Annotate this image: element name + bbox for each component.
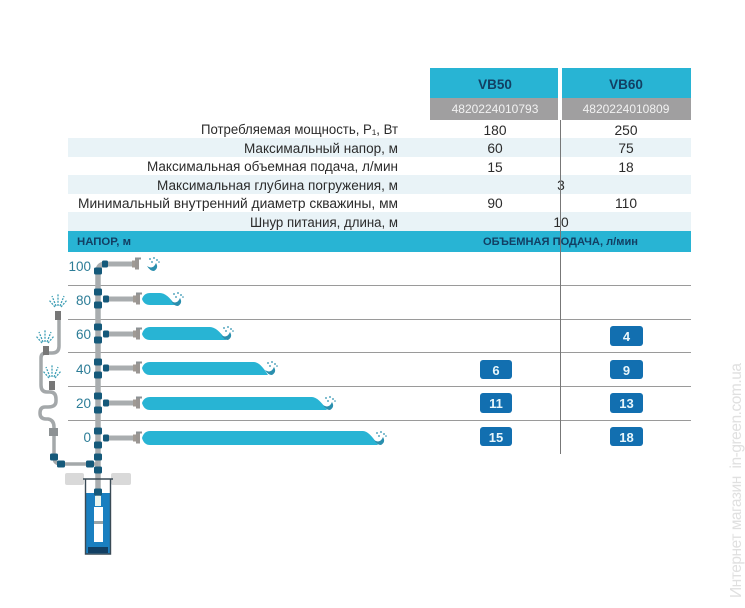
head axis labels: 80 (76, 293, 91, 308)
spec values: 15 (487, 160, 503, 175)
flow bar: 40 m (142, 361, 278, 375)
spec values: 18 (618, 160, 634, 175)
head axis labels: 0 (83, 430, 91, 445)
spec row labels: Максимальный напор, м (244, 141, 398, 156)
side hose with sprinklers (36, 294, 98, 468)
outlet nozzles (102, 258, 142, 444)
spec row labels: Потребляемая мощность, Р₁, Вт (201, 122, 398, 137)
flow value badges: 15 (489, 430, 503, 445)
spec row labels: Минимальный внутренний диаметр скважины, мм (78, 196, 398, 211)
flow bar: 80 m (142, 292, 184, 306)
table header: VB60: VB60 (609, 77, 643, 92)
table header: VB60 (562, 68, 691, 120)
head axis labels: 20 (76, 396, 91, 411)
chart grid (68, 120, 691, 454)
spec values (483, 123, 638, 230)
head axis labels: 100 (68, 259, 91, 274)
spec values: 75 (618, 141, 634, 156)
table header: VB50 (430, 68, 558, 120)
spec values: 90 (487, 196, 503, 211)
table header: VB50: 4820224010793 (452, 102, 539, 116)
flow bar: 100 m (147, 257, 160, 271)
flow value badges: 9 (623, 363, 630, 378)
spec values: 180 (483, 123, 507, 138)
flow value badges: 18 (619, 430, 634, 445)
flow bar: 60 m (142, 326, 234, 340)
spec values: 3 (557, 178, 565, 193)
performance header bar: ОБЪЕМНАЯ ПОДАЧА, л/мин (483, 236, 638, 248)
main riser pipe (94, 264, 106, 530)
flow bar: 0 m (142, 431, 387, 445)
well with pump (83, 479, 113, 554)
spec row labels: Максимальная объемная подача, л/мин (147, 159, 398, 174)
head axis labels: 40 (76, 362, 91, 377)
spec values: 110 (615, 196, 637, 211)
watermark: Интернет магазин in-green.com.ua (728, 363, 745, 598)
spec row labels (78, 122, 398, 230)
flow value badges (480, 326, 643, 446)
table header: VB50: VB50 (478, 77, 512, 92)
flow bar: 20 m (142, 396, 336, 410)
flow value badges: 13 (619, 396, 634, 411)
flow value badges: 4 (623, 329, 631, 344)
performance header bar (68, 231, 691, 252)
ground slabs (65, 473, 131, 485)
performance header bar: НАПОР, м (77, 236, 131, 248)
spec row labels: Максимальная глубина погружения, м (157, 178, 398, 193)
head axis labels: 60 (76, 327, 91, 342)
spec row labels: Шнур питания, длина, м (250, 215, 398, 230)
head axis labels (68, 259, 91, 445)
flow value badges: 6 (492, 363, 500, 378)
spec values: 60 (487, 141, 503, 156)
table header: VB60: 4820224010809 (583, 102, 670, 116)
flow value badges: 11 (489, 396, 503, 411)
spec values: 10 (553, 215, 569, 230)
table stripes (68, 138, 691, 231)
spec values: 250 (614, 123, 638, 138)
